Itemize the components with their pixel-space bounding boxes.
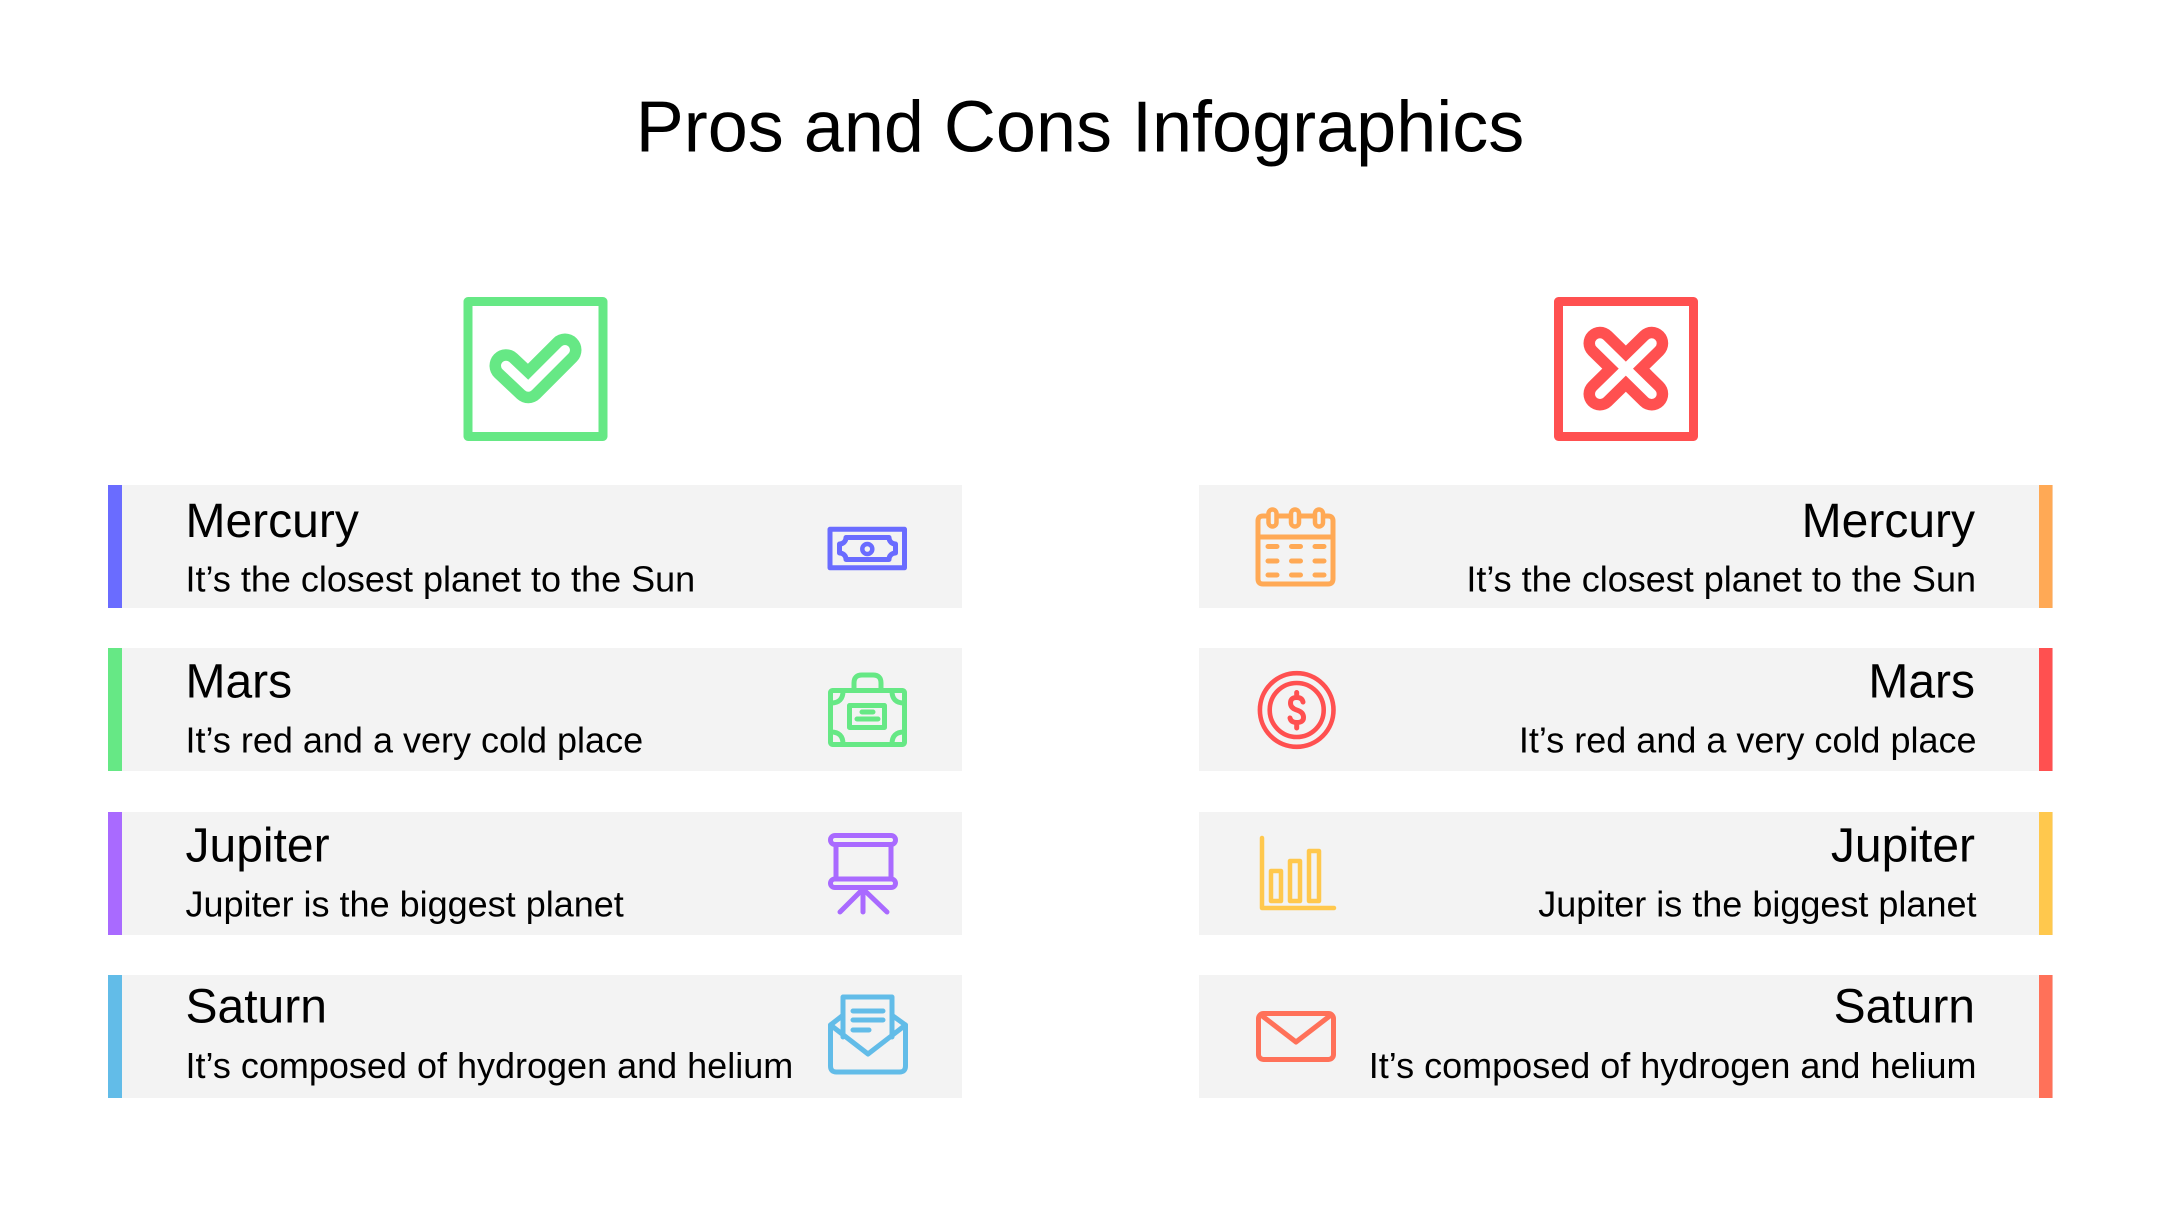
panel: cons [1199, 302, 2053, 1098]
row: cons Saturn [1199, 975, 2053, 1098]
row: pros Jupiter [108, 812, 962, 935]
row: pros Mercury [108, 485, 962, 608]
icon: bar chart [1262, 838, 1334, 908]
icon: dollar coin [1260, 673, 1333, 747]
icon: presentation board [830, 836, 896, 912]
text: Mars description: It’s red and a very cold place [1519, 720, 1976, 761]
icon: calendar [1258, 510, 1333, 584]
heading: Mercury: Mercury [186, 495, 359, 548]
icon: briefcase [830, 675, 904, 744]
heading: Saturn: Saturn [1834, 980, 1975, 1034]
heading: Mercury: Mercury [1802, 495, 1975, 548]
text: Mercury description: It’s the closest planet to the Sun [186, 558, 695, 600]
heading: Saturn: Saturn [186, 980, 327, 1034]
title: Pros and Cons Infographics [636, 88, 1524, 168]
text: Mars description: It’s red and a very cold place [186, 720, 643, 761]
heading: Mars: Mars [186, 656, 292, 708]
text: Mercury description: It’s the closest planet to the Sun [1466, 558, 1976, 600]
panel: pros [108, 302, 962, 1098]
text: Saturn description: It’s composed of hydrogen and helium [1369, 1045, 1976, 1086]
row: pros Mars [108, 648, 962, 771]
text: Jupiter description: Jupiter is the biggest planet [186, 884, 624, 925]
icon: banknote [830, 529, 904, 568]
row: cons Mercury [1199, 485, 2053, 608]
row: cons Mars [1199, 648, 2053, 771]
icon: envelope [1258, 1014, 1334, 1060]
text: Saturn description: It’s composed of hydrogen and helium [186, 1045, 793, 1086]
text: Jupiter description: Jupiter is the biggest planet [1538, 884, 1976, 925]
icon: red cross box [1558, 302, 1694, 436]
icon: open envelope [830, 997, 906, 1072]
row: pros Saturn [108, 975, 962, 1098]
row: cons Jupiter [1199, 812, 2053, 935]
heading: Jupiter: Jupiter [1831, 820, 1975, 872]
heading: Mars: Mars [1868, 656, 1975, 708]
icon: green check box [468, 302, 603, 436]
heading: Jupiter: Jupiter [186, 820, 330, 872]
